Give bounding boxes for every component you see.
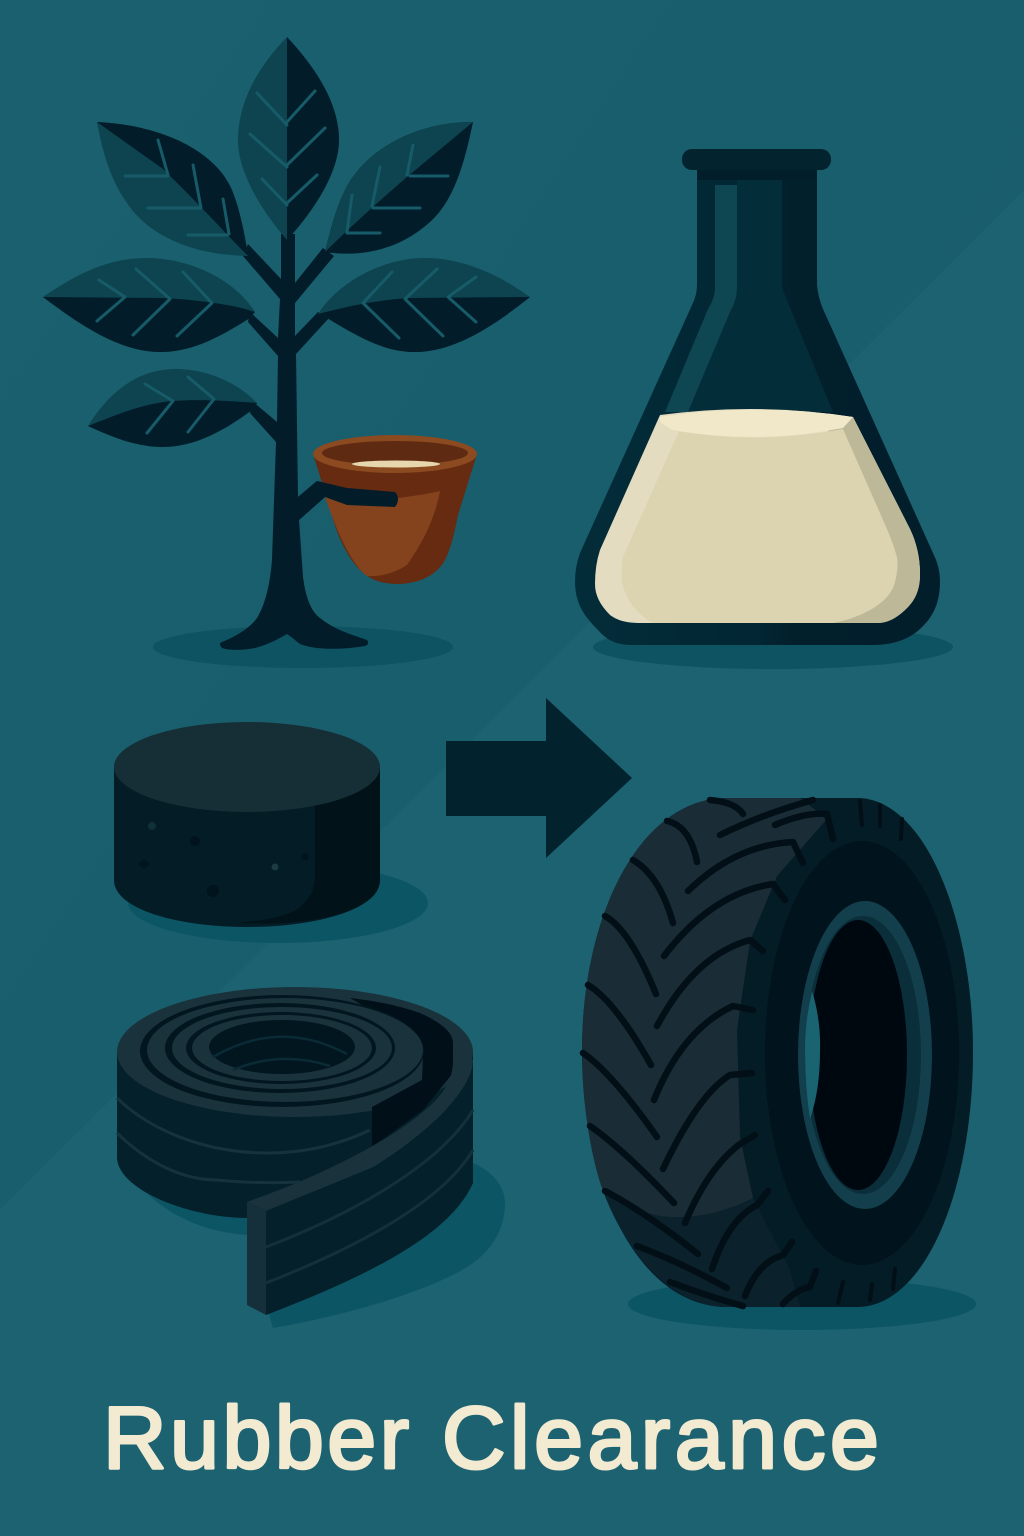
coil strip end cap — [247, 1202, 266, 1315]
tree ground shadow — [153, 626, 453, 668]
tyre see-through gap — [805, 991, 820, 1119]
flask glass centre — [688, 180, 833, 412]
block shadow — [128, 863, 428, 943]
tyre shadow — [628, 1278, 976, 1330]
tyre tread surface — [582, 798, 827, 1217]
tyre rim ring — [798, 901, 932, 1209]
tyre silhouette — [582, 798, 973, 1307]
coil loose strip face — [266, 1060, 473, 1315]
coil strip top — [247, 1060, 473, 1211]
leaf: top — [238, 37, 339, 240]
title — [103, 1388, 879, 1487]
leaf: upper left — [97, 122, 248, 256]
block side — [114, 767, 380, 927]
coil top face — [117, 987, 473, 1117]
leaf: middle left — [43, 258, 255, 352]
coil shadow — [137, 1163, 505, 1328]
tyre tread grooves — [583, 800, 902, 1306]
leaf: upper right — [325, 122, 473, 254]
arrow — [446, 698, 632, 858]
icon: tyre — [582, 798, 976, 1330]
icon: coiled rubber strip — [117, 987, 505, 1328]
block top — [114, 722, 380, 812]
flask neck top band — [697, 170, 817, 180]
tyre sidewall — [765, 841, 959, 1265]
flask rim — [682, 149, 831, 170]
flask shadow — [593, 625, 953, 669]
tyre hole — [809, 920, 907, 1190]
coil strip face lines — [266, 1110, 473, 1283]
liquid right shade — [828, 414, 920, 623]
icon: flask of latex — [575, 149, 953, 669]
liquid main tone — [622, 429, 898, 623]
flask glass — [575, 170, 940, 645]
leaf: middle right — [318, 258, 530, 352]
icon: latex collection cup — [298, 435, 477, 584]
icon: raw rubber block — [114, 722, 428, 943]
tyre lower tread shade — [603, 1191, 800, 1307]
liquid surface — [660, 410, 853, 437]
tree trunk and branches — [220, 234, 398, 650]
coil front lines — [117, 1098, 370, 1183]
coil body — [117, 1052, 473, 1218]
block pores — [139, 822, 308, 897]
icon: rubber tree with collecting cup — [43, 37, 530, 668]
title: Clearance — [442, 1388, 879, 1487]
coil spiral rings — [140, 995, 424, 1107]
coil dark crescent — [350, 998, 453, 1147]
flask highlight stripe — [665, 185, 737, 412]
title: Rubber — [103, 1388, 409, 1487]
leaf: lower left — [88, 369, 257, 447]
tyre inner ring — [805, 916, 921, 1194]
block side shade — [238, 767, 380, 924]
latex liquid — [595, 409, 920, 623]
